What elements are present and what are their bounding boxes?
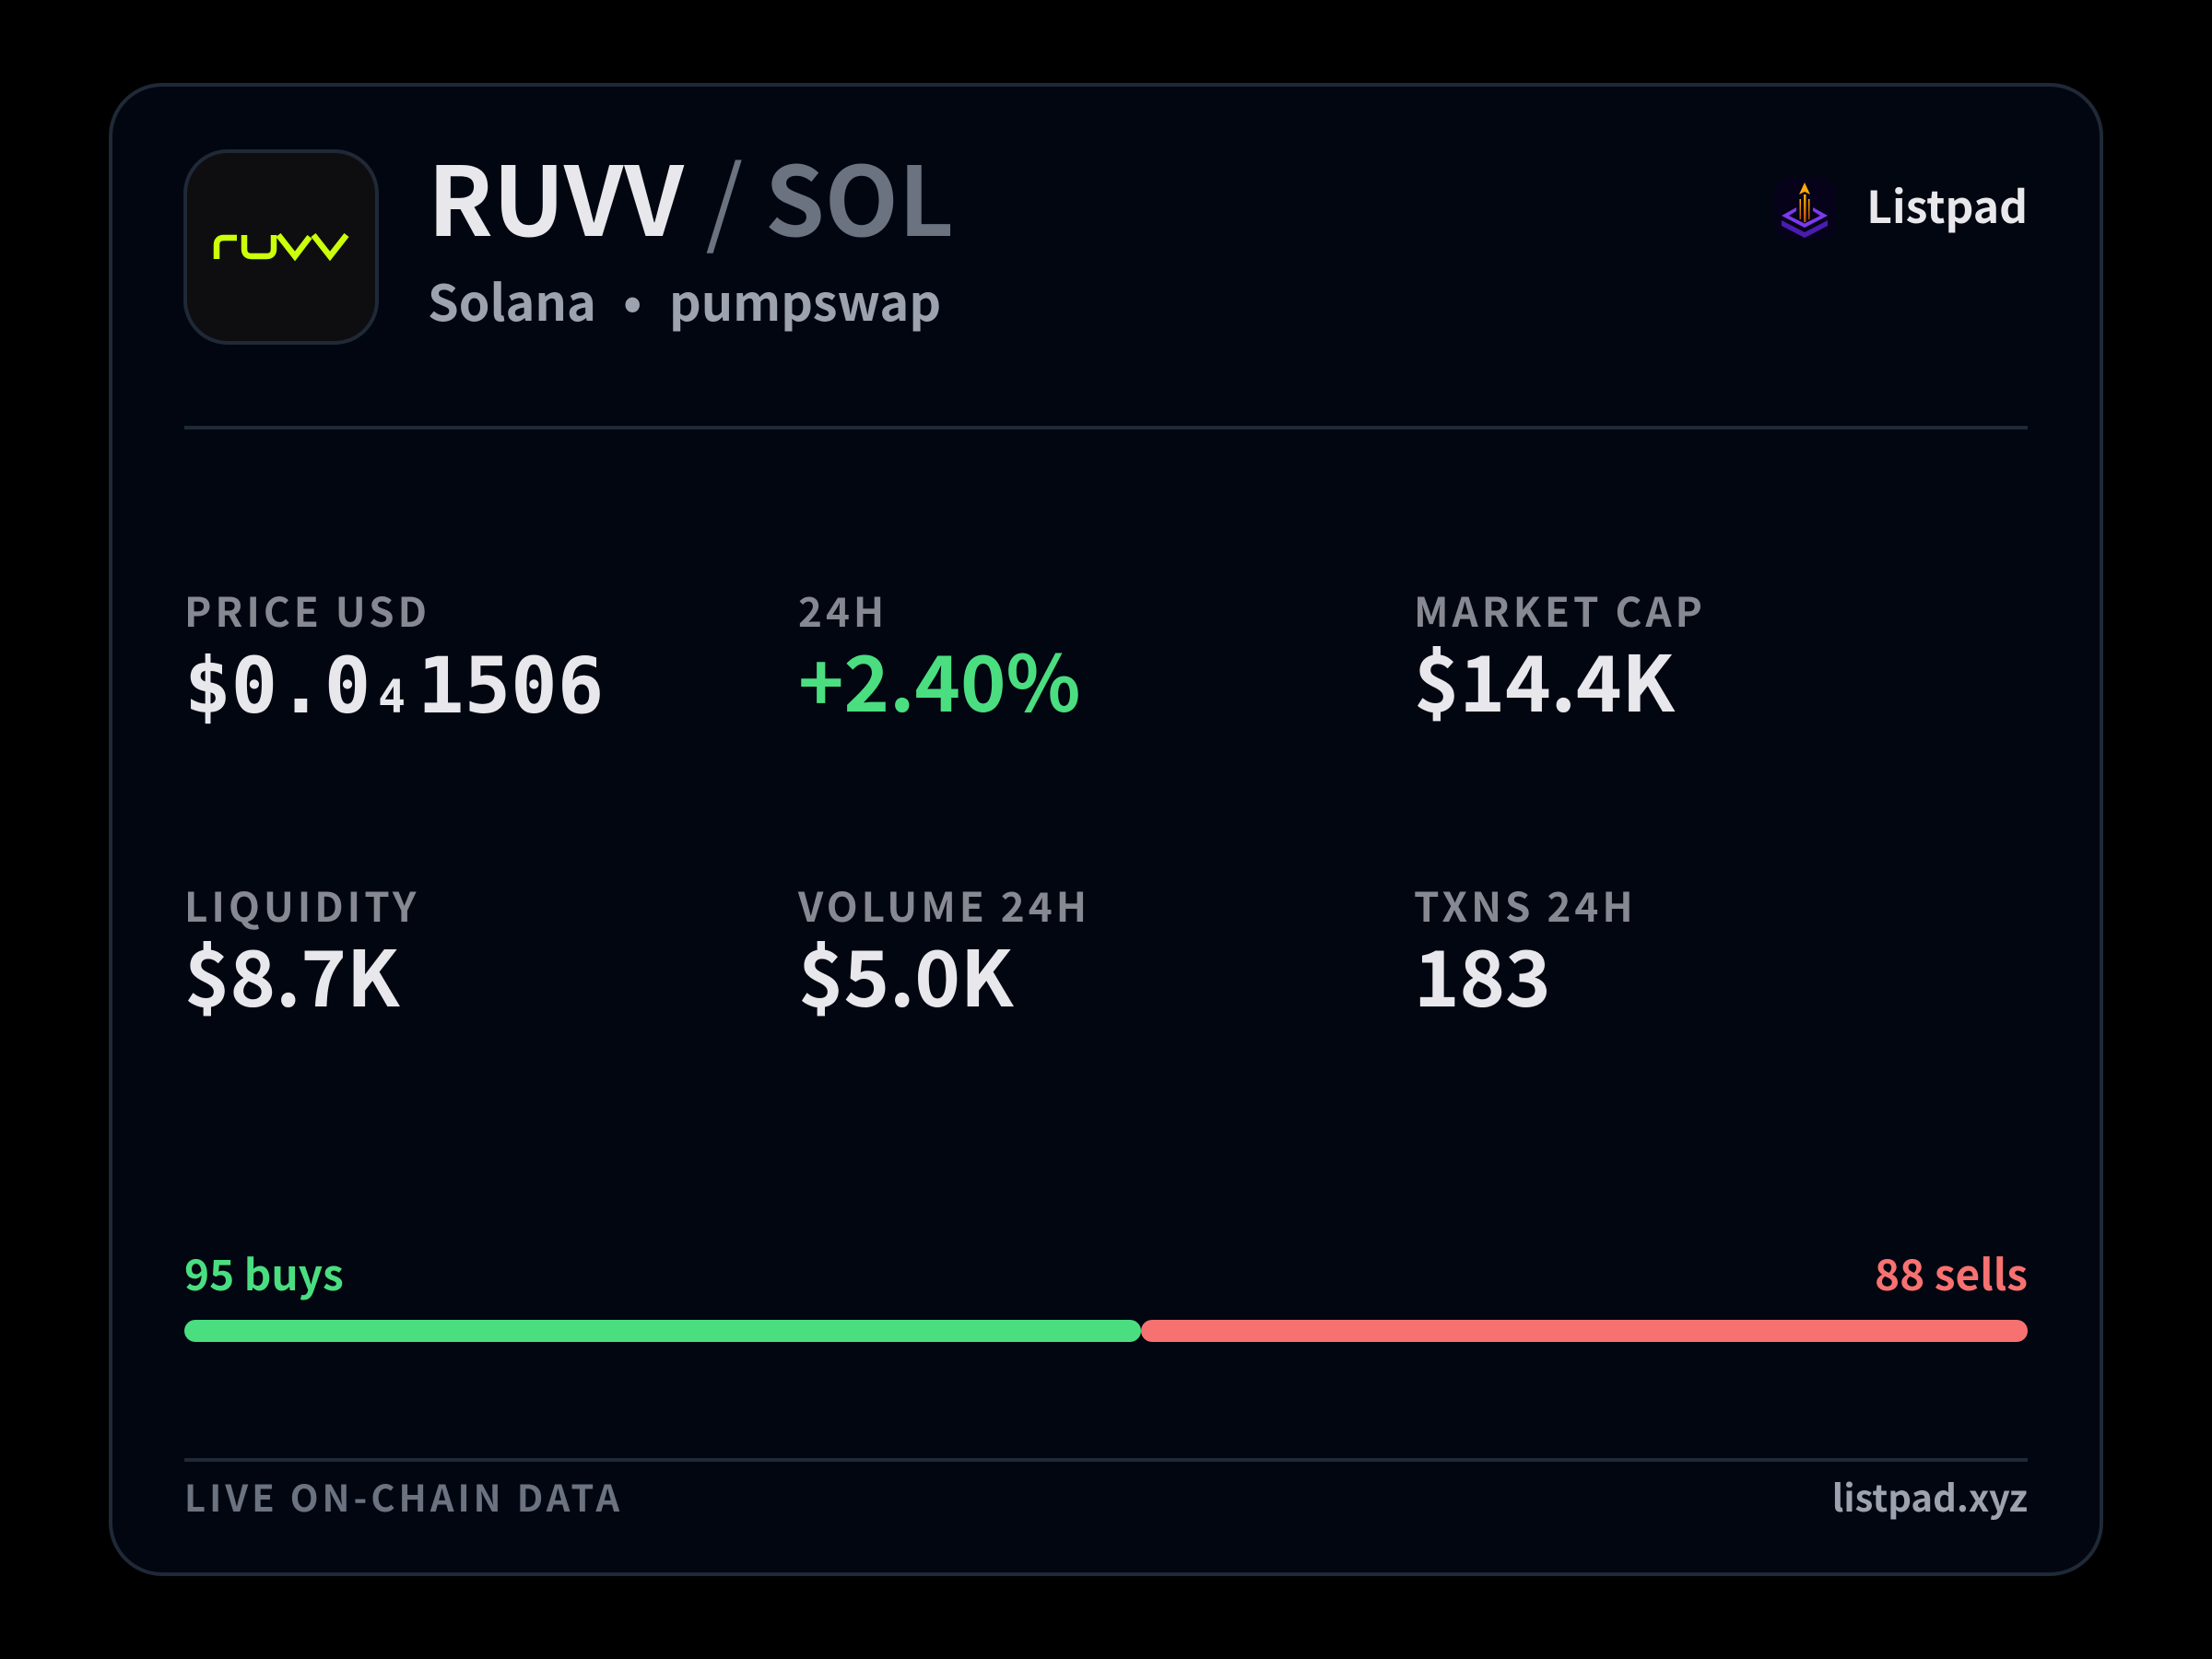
footer site: listpad.xyz [1832,1469,2028,1523]
title: pair name: RUVV / SOL [428,124,954,264]
metric: price usd: 1506 [418,641,604,731]
metric: market cap: MARKET CAP [1414,580,1706,639]
metric: 24h change: 24H [798,580,888,639]
metric: txns 24h: 183 [1414,918,1551,1030]
metric: liquidity: $8.7K [184,918,400,1030]
buys and sells bar [184,1242,2028,1342]
footer note: LIVE ON-CHAIN DATA [184,1469,623,1523]
subtitle: chain and dex: pumpswap [669,263,941,335]
metric: volume 24h: VOLUME 24H [797,875,1090,934]
sells label: 88 sells [1875,1242,2028,1303]
buys label: 95 buys [184,1242,344,1303]
buys bar segment [184,1320,1141,1342]
metric: liquidity: LIQUIDITY [184,875,419,934]
icon: Listpad logo [1773,177,1836,240]
metric: txns 24h [1414,875,1637,1030]
metric: 24h change: +2.40% [798,623,1080,735]
header [185,124,2028,343]
metric: txns 24h: TXNS 24H [1414,875,1637,934]
metric: price usd: 4 [378,670,406,724]
header divider [184,426,2028,429]
metric: price usd: PRICE USD [184,580,430,639]
footer divider [184,1458,2028,1462]
metric: market cap [1414,580,1706,735]
metric: liquidity [184,875,419,1030]
metric: market cap: $14.4K [1414,623,1676,735]
metric: volume 24h: $5.0K [798,918,1014,1030]
metric: price usd [184,580,604,731]
subtitle: chain and dex: • [623,262,641,335]
icon: ruvv token logo [185,151,377,343]
metric: volume 24h [797,875,1090,1030]
metric: price usd: $0.0 [184,641,371,731]
brand name: Listpad [1866,171,2028,236]
subtitle: chain and dex: Solana [428,263,596,335]
sells bar segment [1141,1320,2028,1342]
